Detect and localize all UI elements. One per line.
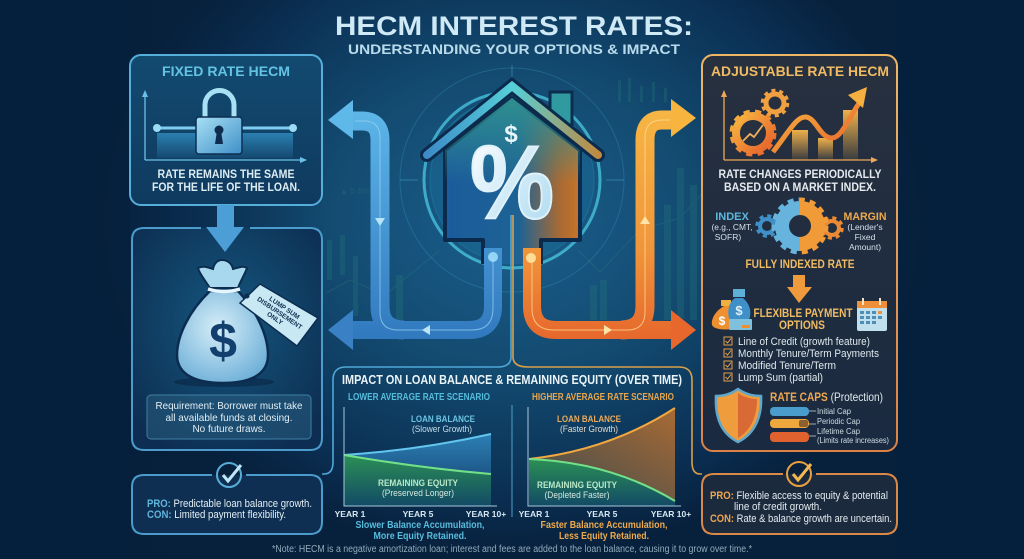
diagram: cap levels: Lifetime Cap <box>817 427 861 436</box>
icon: lump sum tag: DISBURSEMENT <box>255 296 303 331</box>
chart: lower rate scenario <box>335 392 506 542</box>
chart: higher rate scenario: (Depleted Faster) <box>544 490 610 501</box>
chart: higher rate scenario: YEAR 1 <box>519 509 550 519</box>
chart: lower rate scenario: (Preserved Longer) <box>382 488 454 499</box>
panel: lump sum <box>132 228 322 450</box>
text: pro and con: CON: Limited payment flexibility. <box>147 509 286 521</box>
text: pro and con: CON: Rate & balance growth are uncertain. <box>710 513 892 525</box>
list: payment options <box>724 336 879 384</box>
chart: higher rate scenario: LOAN BALANCE <box>557 414 621 425</box>
icon: percent and dollar on house: % <box>470 125 554 241</box>
text: fixed rate description: RATE REMAINS THE SAME <box>158 167 294 181</box>
chart: higher rate scenario: YEAR 5 <box>587 509 618 519</box>
icon: calendar <box>857 298 887 331</box>
heading: impact: IMPACT ON LOAN BALANCE & REMAINING EQUITY (OVER TIME) <box>342 373 682 387</box>
diagram: index plus margin gears: Amount) <box>849 242 881 252</box>
diagram: index plus margin gears: (e.g., CMT, <box>712 222 752 232</box>
background market chart: ▲ 0.450 <box>340 187 371 196</box>
text: pro and con <box>147 498 312 521</box>
text: pro and con: line of credit growth. <box>734 501 822 513</box>
diagram: index plus margin gears: SOFR) <box>715 232 741 242</box>
heading: fixed rate: FIXED RATE HECM <box>162 63 290 79</box>
arrow: to payment options <box>787 275 812 303</box>
list: payment options: Line of Credit (growth feature) <box>738 336 870 348</box>
icon: lump sum tag <box>240 284 318 346</box>
title <box>335 11 693 57</box>
diagram: index plus margin gears: INDEX <box>715 211 749 223</box>
chart: lower rate scenario: YEAR 10+ <box>466 509 506 519</box>
icon: money bag: $ <box>209 313 237 369</box>
list: payment options: Lump Sum (partial) <box>738 372 823 384</box>
chart: lower rate scenario: Slower Balance Accumulation, <box>356 519 485 531</box>
text: fixed rate description: FOR THE LIFE OF THE LOAN. <box>152 180 300 194</box>
chart: lower rate scenario: (Slower Growth) <box>412 424 472 435</box>
diagram: index plus margin gears: Fixed <box>855 232 876 242</box>
heading: flexible payment options <box>754 306 853 332</box>
chart: rising rate with gears <box>721 87 878 163</box>
icon: money bag <box>174 260 274 387</box>
icon: money bags and card: $ <box>719 314 726 328</box>
title: HECM INTEREST RATES: <box>335 11 693 41</box>
list: payment options: Modified Tenure/Term <box>738 360 836 372</box>
panel: impact on loan balance <box>335 373 691 542</box>
icon: lump sum tag: LUMP SUM <box>268 296 301 321</box>
icon: padlock <box>196 90 242 154</box>
chart: higher rate scenario: (Faster Growth) <box>560 424 618 435</box>
arrow: adjustable rate orange paths <box>526 99 696 350</box>
text: adjustable description <box>718 167 882 194</box>
panel: fixed pro and con <box>132 463 322 534</box>
icon: shield <box>716 389 761 442</box>
chart: lower rate scenario: YEAR 1 <box>335 509 366 519</box>
diagram: cap levels <box>770 407 889 445</box>
chart: higher rate scenario: Less Equity Retained. <box>559 530 649 542</box>
chart: lower rate scenario: REMAINING EQUITY <box>378 478 459 489</box>
chart: lower rate scenario: YEAR 5 <box>403 509 434 519</box>
glowing rings behind house <box>400 65 624 292</box>
chart: higher rate scenario <box>519 392 691 542</box>
text: adjustable description: BASED ON A MARKET INDEX. <box>724 180 876 194</box>
diagram: index plus margin gears: (Lender's <box>847 222 883 232</box>
chart: flat rate <box>142 90 307 163</box>
chart: higher rate scenario: Faster Balance Accumulation, <box>540 519 668 531</box>
chart: higher rate scenario: YEAR 10+ <box>651 509 691 519</box>
icon: house <box>427 86 598 264</box>
callout: requirement: No future draws. <box>192 423 266 435</box>
icon: check badge <box>787 462 811 486</box>
text: adjustable description: RATE CHANGES PERIODICALLY <box>718 167 882 181</box>
icon: percent and dollar on house: $ <box>504 121 518 148</box>
chart: higher rate scenario: HIGHER AVERAGE RATE SCENARIO <box>532 392 674 403</box>
text: fully indexed rate: FULLY INDEXED RATE <box>746 257 854 271</box>
callout: requirement <box>147 395 311 439</box>
title: UNDERSTANDING YOUR OPTIONS & IMPACT <box>348 41 680 57</box>
list: payment options: Monthly Tenure/Term Payments <box>738 348 879 360</box>
background market chart <box>326 78 705 320</box>
callout: requirement: Requirement: Borrower must take <box>156 400 303 412</box>
panel: adjustable rate HECM <box>702 55 897 451</box>
heading: flexible payment options: FLEXIBLE PAYMENT <box>754 306 853 320</box>
chart: lower rate scenario: LOWER AVERAGE RATE SCENARIO <box>348 392 490 403</box>
heading: adjustable rate: ADJUSTABLE RATE HECM <box>711 63 889 79</box>
arrow: fixed panel to lump sum <box>206 205 244 252</box>
chart: lower rate scenario: More Equity Retained. <box>374 530 467 542</box>
diagram: cap levels: Periodic Cap <box>817 417 861 426</box>
text: fixed rate description <box>152 167 300 194</box>
chart: lower rate scenario: LOAN BALANCE <box>411 414 475 425</box>
panel: adjustable pro and con <box>702 462 897 534</box>
diagram: index plus margin gears <box>712 200 887 252</box>
connector lines to impact panel <box>322 215 702 474</box>
icon: money bags and card <box>712 289 752 330</box>
diagram: cap levels: Initial Cap <box>817 407 852 416</box>
arrow: fixed rate blue paths <box>328 100 498 350</box>
icon: lump sum tag: ONLY <box>265 311 284 327</box>
heading: flexible payment options: OPTIONS <box>779 318 825 332</box>
text: pro and con: PRO: Flexible access to equity & potential <box>710 490 888 502</box>
icon: check badge <box>217 463 241 487</box>
footnote: *Note: HECM is a negative amortization loan; interest and fees are added to the loan balance, causing it to grow over time.* <box>272 544 752 555</box>
diagram: index plus margin gears: MARGIN <box>844 211 887 223</box>
diagram: cap levels: (Limits rate increases) <box>817 436 889 445</box>
icon: money bags and card: $ <box>735 303 743 318</box>
text: pro and con <box>710 490 892 525</box>
heading: rate caps: RATE CAPS (Protection) <box>770 390 883 404</box>
callout: requirement: all available funds at closing. <box>166 412 292 424</box>
text: pro and con: PRO: Predictable loan balance growth. <box>147 498 312 510</box>
chart: higher rate scenario: REMAINING EQUITY <box>537 480 618 491</box>
panel: fixed rate HECM <box>130 55 322 205</box>
